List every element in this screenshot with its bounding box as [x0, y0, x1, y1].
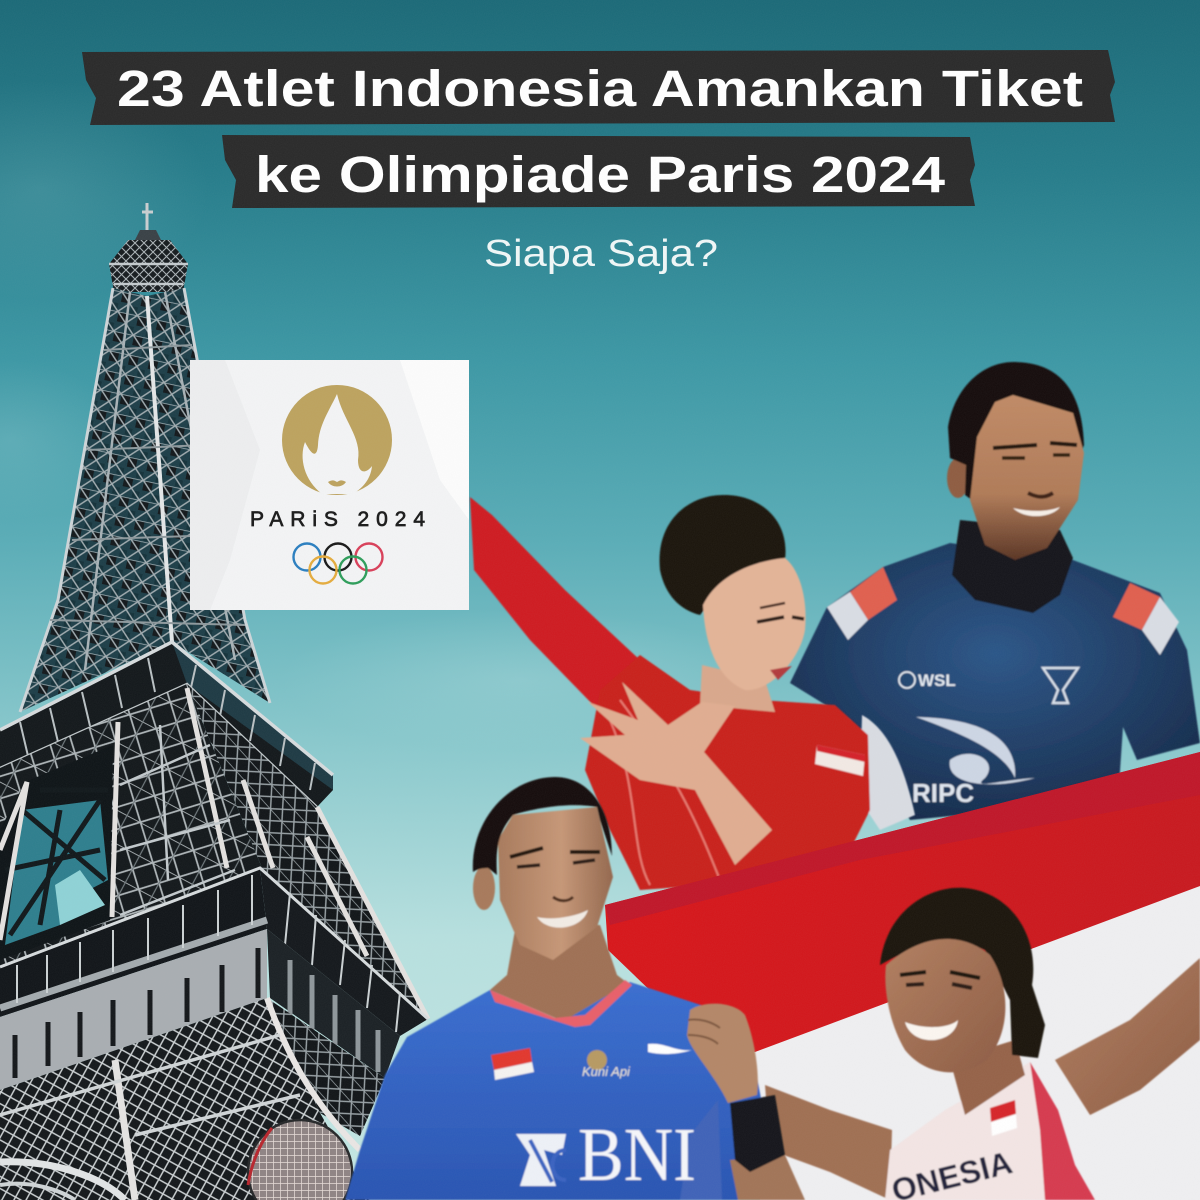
athlete: runner — [765, 888, 1200, 1200]
runner raised arm — [1055, 958, 1200, 1115]
surfer facial features — [993, 443, 1077, 516]
surfer ear — [947, 458, 969, 498]
runner face — [885, 939, 1005, 1072]
runner jersey flag — [990, 1100, 1017, 1136]
player face — [498, 807, 613, 960]
surfer jersey logos — [899, 668, 1078, 808]
gymnast hair — [660, 495, 786, 615]
runner left arm — [765, 1085, 892, 1200]
gymnast face — [703, 558, 806, 690]
tower upper section lattice — [20, 288, 270, 712]
gymnast hand and forearm — [580, 682, 772, 865]
gymnast raised arm — [470, 497, 640, 712]
tower middle section — [0, 684, 428, 1019]
title bar line 2 — [222, 135, 975, 208]
first platform band — [0, 642, 333, 807]
player pendant and brand mark — [582, 1044, 692, 1079]
Paris 2024 logo flag — [190, 360, 469, 610]
gymnast white sleeve edge — [860, 715, 915, 830]
tower spire and cross — [132, 203, 164, 246]
gymnast leotard highlights — [610, 700, 720, 885]
runner hair — [880, 888, 1045, 1058]
player jersey flag — [491, 1048, 534, 1080]
tower lower section lattice — [0, 998, 385, 1200]
player fingers — [688, 1019, 720, 1044]
surfer hair — [948, 362, 1084, 500]
runner top — [885, 1062, 1075, 1200]
surfer wetsuit — [790, 543, 1200, 820]
athlete: gymnast — [470, 495, 915, 890]
player jersey accent — [680, 1100, 722, 1200]
Eiffel tower — [0, 203, 428, 1200]
gymnast neck — [700, 665, 775, 712]
player BNI logo: BNI — [578, 1113, 696, 1197]
player forearm — [730, 1155, 805, 1200]
logo wordmark: PARiS 2024 — [250, 508, 425, 531]
player hair — [473, 777, 612, 875]
surfer shoulder patches — [827, 567, 1179, 655]
Indonesian flag — [605, 752, 1200, 1200]
surfer jersey logos: RIPC — [912, 778, 974, 808]
player wristband — [730, 1095, 785, 1172]
player pendant and brand mark: Kuni Api — [582, 1064, 631, 1079]
tower top cabin — [109, 240, 188, 292]
flag white lower stripe — [750, 880, 1200, 1200]
player neck — [490, 925, 630, 1022]
title bar line 2: ke Olimpiade Paris 2024 — [255, 146, 946, 203]
plinth with corbels — [0, 929, 400, 1090]
player facial features — [510, 848, 600, 928]
runner neck — [950, 1040, 1025, 1115]
subtitle: Siapa Saja? — [484, 233, 718, 275]
title bar line 1 — [82, 50, 1115, 125]
flag red upper stripe — [605, 752, 1200, 1052]
surfer jersey logos: WSL — [918, 671, 956, 690]
player fist — [687, 1004, 758, 1103]
athlete: surfer — [790, 362, 1200, 820]
player jersey — [345, 982, 780, 1200]
gymnast leotard flag patch — [815, 745, 865, 776]
second level gallery — [0, 868, 428, 1036]
surfer collar and neck — [952, 520, 1073, 613]
olympic rings — [294, 544, 382, 584]
gymnast leotard — [585, 655, 870, 890]
player ear — [473, 866, 495, 910]
player BNI logo — [516, 1113, 696, 1197]
flag dark fold — [605, 752, 1200, 925]
player collar — [490, 980, 632, 1027]
badminton racket — [248, 1120, 352, 1200]
surfer face — [970, 395, 1084, 560]
athlete: badminton player — [345, 777, 805, 1200]
logo flame medallion — [282, 385, 392, 495]
title bar line 1: 23 Atlet Indonesia Amankan Tiket — [117, 60, 1083, 117]
